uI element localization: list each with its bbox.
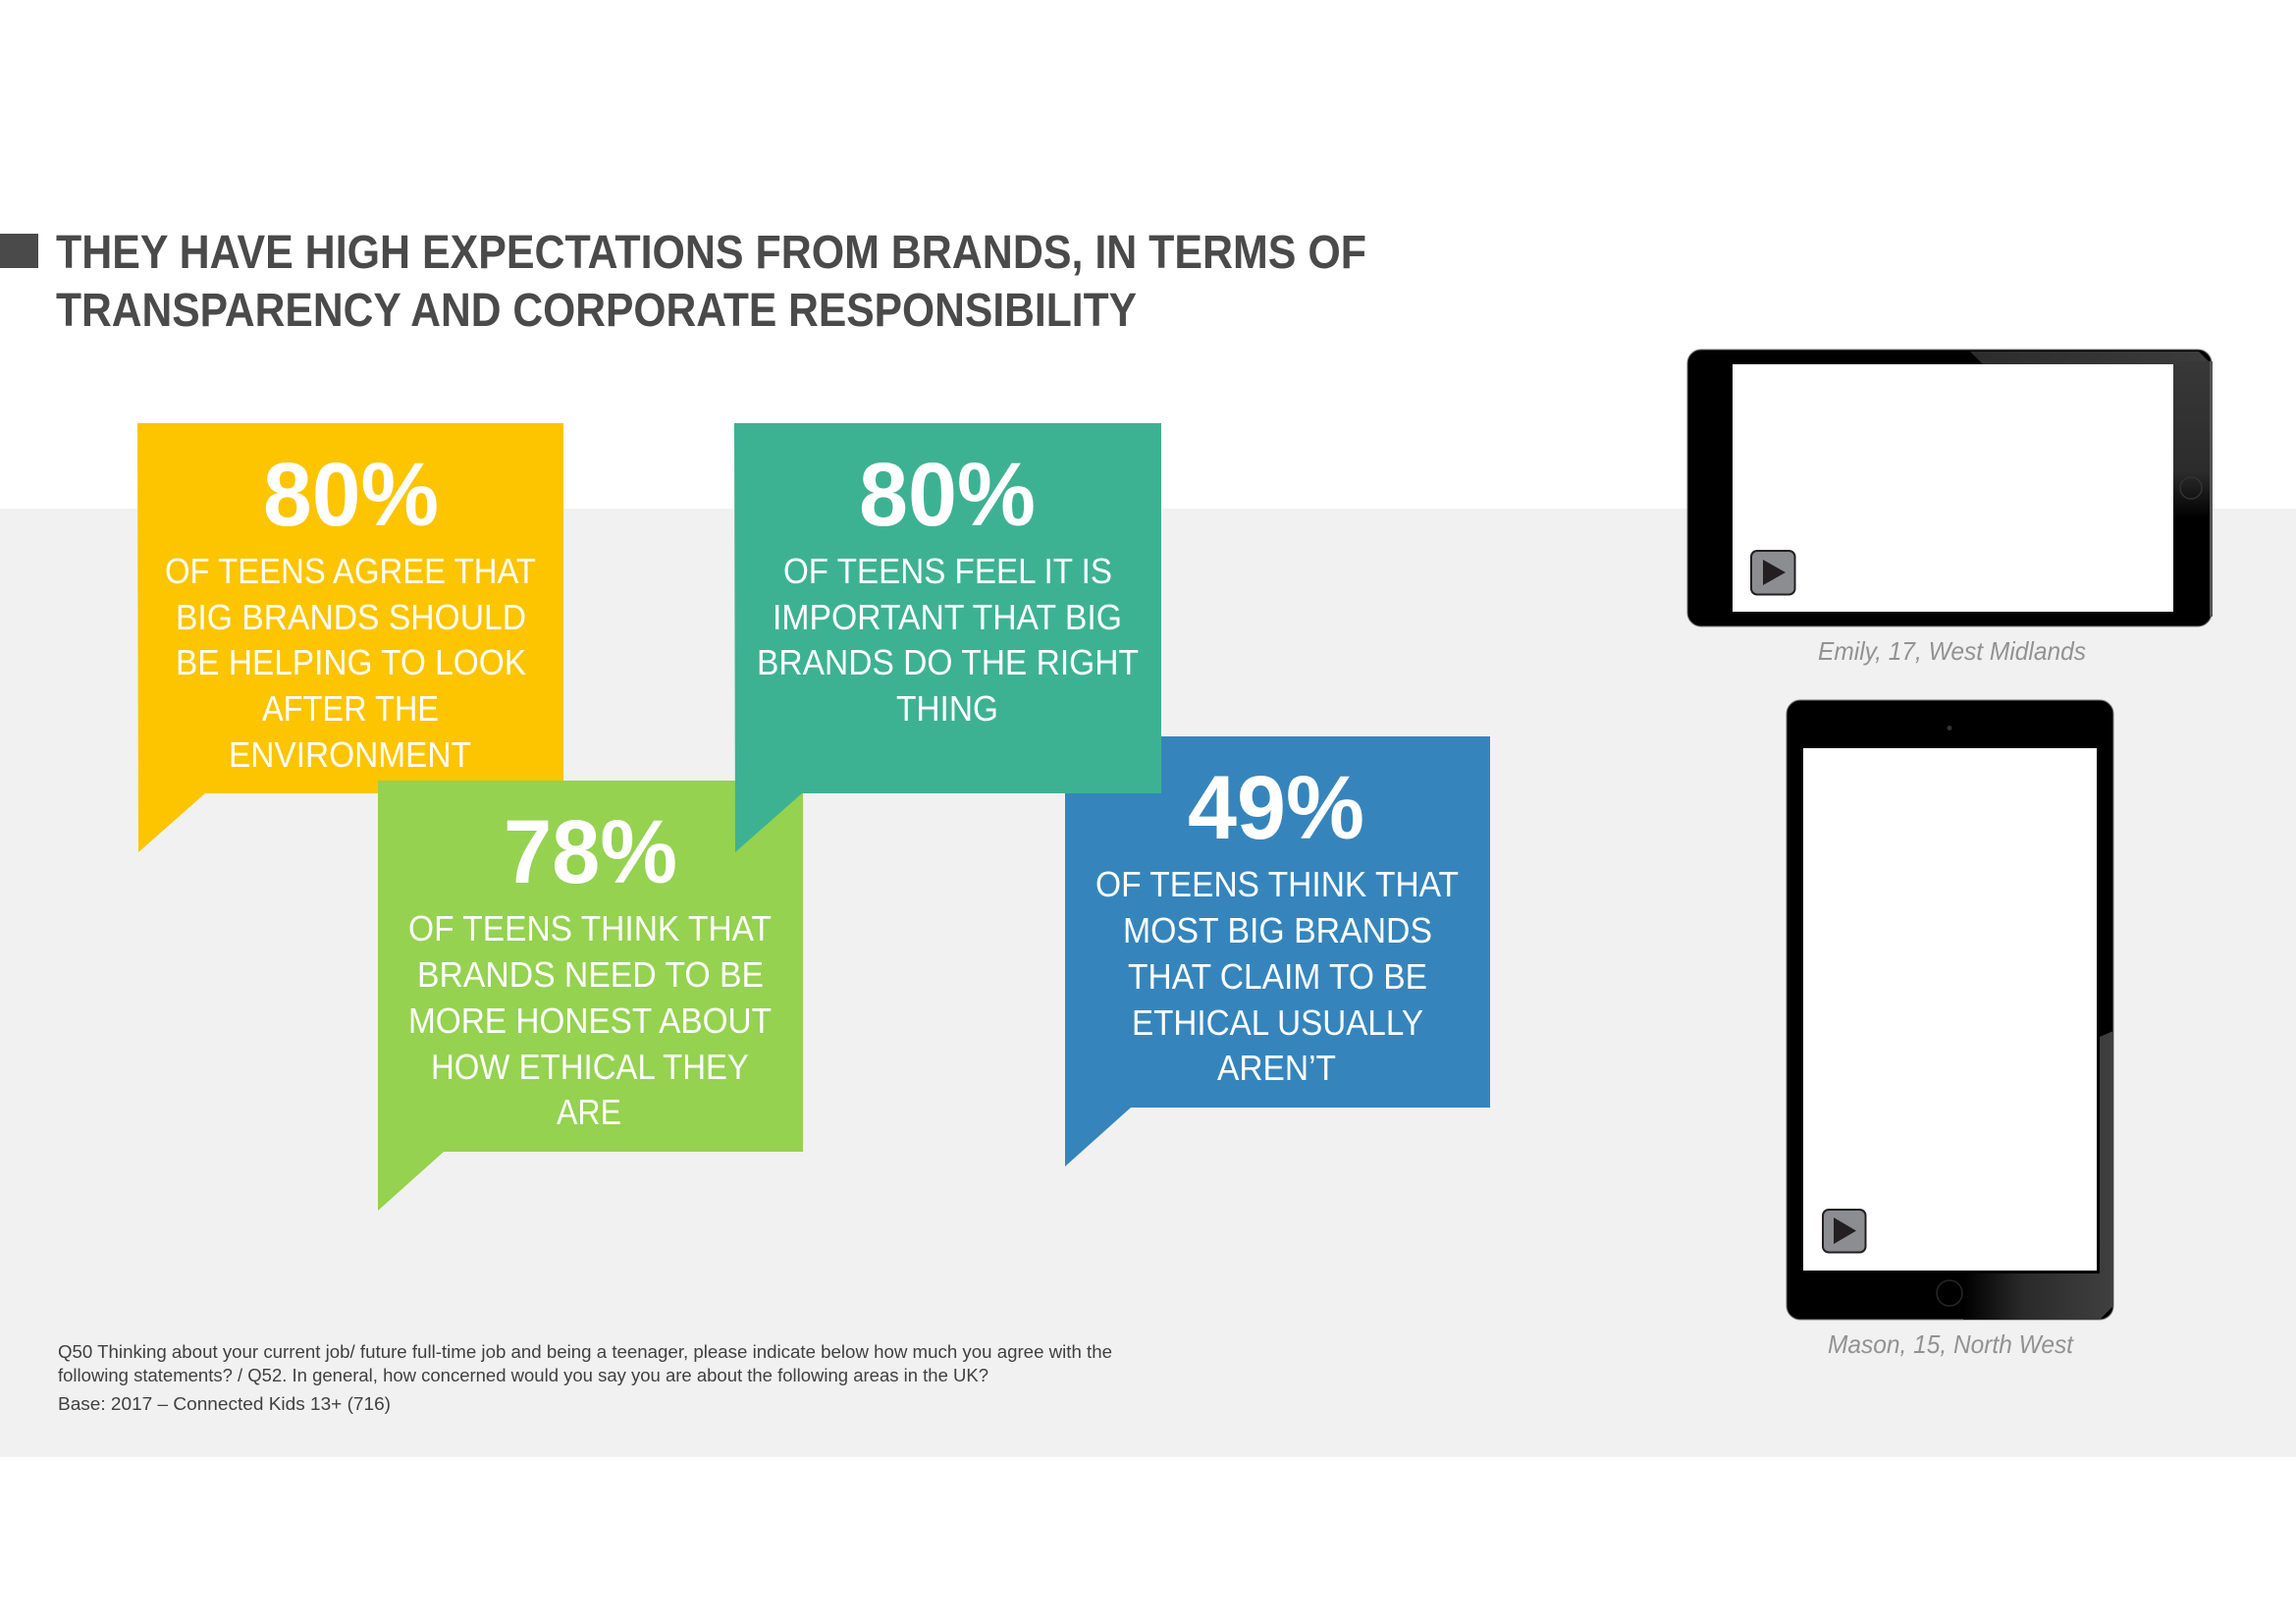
panel: teal speech bubble 80% bbox=[734, 423, 1161, 852]
panel: yellow speech bubble 80%: AFTER THE bbox=[262, 688, 439, 729]
panel: green speech bubble 78%: MORE HONEST ABOUT bbox=[408, 1001, 772, 1041]
panel: teal speech bubble 80%: 80% bbox=[859, 445, 1036, 545]
footnote: Base: 2017 – Connected Kids 13+ (716) bbox=[58, 1394, 391, 1414]
panel: blue speech bubble 49%: ETHICAL USUALLY bbox=[1132, 1002, 1423, 1043]
panel: yellow speech bubble 80%: BIG BRANDS SHOULD bbox=[176, 597, 526, 637]
panel: teal speech bubble 80%: THING bbox=[896, 688, 998, 729]
title bullet bbox=[0, 234, 38, 268]
panel: blue speech bubble 49%: AREN’T bbox=[1217, 1048, 1336, 1088]
footnote: following statements? / Q52. In general, how concerned would you say you are about the following areas in the UK? bbox=[58, 1366, 988, 1385]
footnote: Q50 Thinking about your current job/ future full-time job and being a teenager, please indicate below how much you agree with the bbox=[58, 1342, 1112, 1362]
title: TRANSPARENCY AND CORPORATE RESPONSIBILITY bbox=[56, 285, 1137, 337]
panel: blue speech bubble 49% bbox=[1065, 736, 1490, 1166]
panel: blue speech bubble 49%: MOST BIG BRANDS bbox=[1123, 910, 1432, 950]
panel: green speech bubble 78%: 78% bbox=[504, 802, 677, 902]
portrait tablet bbox=[1787, 700, 2113, 1320]
panel: yellow speech bubble 80% bbox=[137, 423, 563, 852]
panel: green speech bubble 78% bbox=[378, 781, 803, 1211]
grey background band bbox=[0, 509, 2296, 1457]
icon: play button bbox=[1751, 551, 1794, 595]
panel: blue speech bubble 49%: OF TEENS THINK THAT bbox=[1095, 864, 1459, 904]
panel: yellow speech bubble 80%: ENVIRONMENT bbox=[229, 734, 471, 775]
panel: yellow speech bubble 80%: OF TEENS AGREE THAT bbox=[165, 551, 536, 591]
panel: green speech bubble 78%: HOW ETHICAL THEY bbox=[431, 1047, 749, 1087]
panel: yellow speech bubble 80%: BE HELPING TO LOOK bbox=[176, 642, 526, 682]
panel: teal speech bubble 80%: BRANDS DO THE RIGHT bbox=[757, 642, 1139, 682]
panel: green speech bubble 78%: OF TEENS THINK THAT bbox=[408, 908, 772, 948]
panel: teal speech bubble 80%: IMPORTANT THAT BIG bbox=[773, 597, 1122, 637]
title bbox=[56, 227, 1366, 337]
panel: green speech bubble 78%: ARE bbox=[557, 1092, 621, 1132]
panel: teal speech bubble 80%: OF TEENS FEEL IT IS bbox=[783, 551, 1112, 591]
landscape tablet bbox=[1687, 350, 2213, 626]
caption: Emily: Emily, 17, West Midlands bbox=[1818, 636, 2086, 666]
panel: green speech bubble 78%: BRANDS NEED TO BE bbox=[417, 954, 764, 995]
caption: Mason: Mason, 15, North West bbox=[1828, 1329, 2075, 1359]
panel: yellow speech bubble 80%: 80% bbox=[263, 445, 439, 545]
panel: blue speech bubble 49%: THAT CLAIM TO BE bbox=[1128, 956, 1427, 997]
icon: play button bbox=[1823, 1210, 1865, 1253]
title: THEY HAVE HIGH EXPECTATIONS FROM BRANDS, IN TERMS OF bbox=[56, 227, 1366, 279]
footnote bbox=[58, 1342, 1112, 1414]
panel: blue speech bubble 49%: 49% bbox=[1188, 758, 1364, 858]
